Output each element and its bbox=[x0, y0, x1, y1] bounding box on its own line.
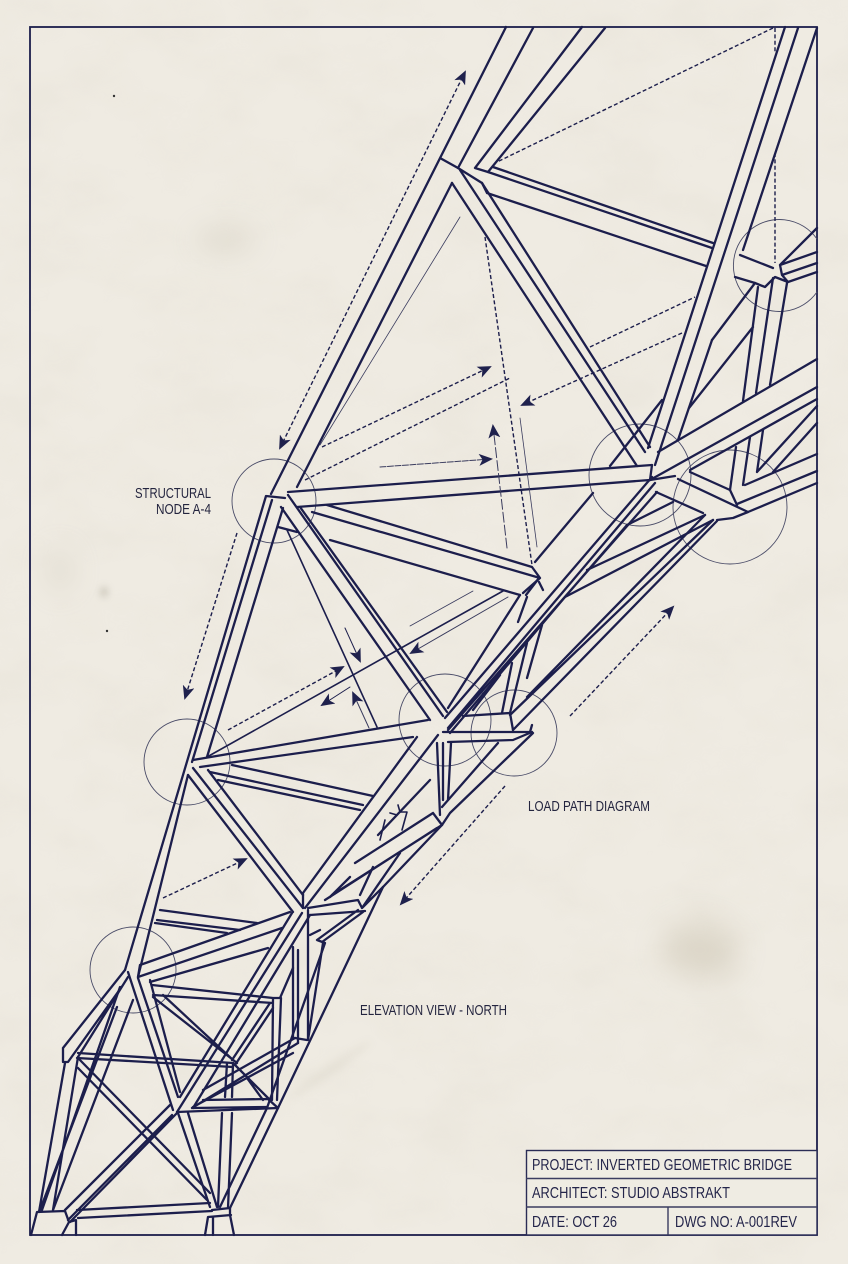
node detail circles bbox=[90, 220, 817, 1013]
truss: mid joint struts bbox=[443, 578, 543, 742]
arrow: small up bbox=[353, 693, 369, 728]
truss: lower right chord bbox=[230, 515, 717, 1208]
arrow: small down-left bbox=[322, 687, 350, 705]
arrow: centre horizontal bbox=[380, 459, 491, 467]
truss: top strut pair bbox=[475, 27, 605, 172]
truss: lower mid chord bbox=[267, 735, 451, 1108]
truss: upper right chord bbox=[648, 27, 817, 465]
label: elevation view: ELEVATION VIEW - NORTH bbox=[360, 1002, 507, 1019]
arrow: lower right down bbox=[401, 786, 505, 904]
truss: central horizontal beam bbox=[288, 465, 652, 507]
arrow: centre back load bbox=[522, 333, 682, 405]
footing: centre bbox=[205, 1208, 234, 1235]
truss: lower tower columns bbox=[152, 910, 323, 1112]
truss: mid beam to left node bbox=[193, 720, 428, 810]
footing: left bbox=[31, 1211, 76, 1235]
title block: date: DATE: OCT 26 bbox=[532, 1214, 617, 1231]
truss: top node diagonal bbox=[452, 170, 650, 466]
truss: diagonals from node A-4 bbox=[207, 495, 503, 757]
truss: upper right node bbox=[689, 228, 817, 408]
dashed construction lines bbox=[320, 28, 775, 626]
truss: short beams across lower chord bbox=[138, 910, 290, 982]
truss: main rising chord bbox=[445, 400, 713, 733]
label: structural node: NODE A-4 bbox=[156, 501, 211, 518]
arrow: centre upper right bbox=[322, 367, 490, 447]
truss: right bar and lower struts bbox=[650, 359, 817, 520]
arrow: brace line bbox=[411, 597, 508, 653]
truss: left lower chord bbox=[125, 496, 285, 977]
arrow: dashed lower left brace bbox=[228, 667, 343, 730]
truss: top cross beam bbox=[458, 167, 713, 266]
arrow: centre vertical bbox=[493, 426, 507, 548]
dashed line: centre bbox=[305, 378, 510, 480]
title block: drawing number: DWG NO: A-001REV bbox=[675, 1214, 797, 1231]
label: structural node: STRUCTURAL bbox=[135, 485, 211, 502]
title block bbox=[526, 1150, 817, 1235]
arrow: lower right up bbox=[570, 607, 673, 716]
truss: diagonal to lower node bbox=[188, 768, 303, 912]
arrow: lower left dashed bbox=[163, 859, 246, 898]
arrow: upper chord load, double headed bbox=[280, 72, 465, 448]
truss: base bracing bbox=[39, 970, 267, 1222]
truss: node A-4 to mid beam bbox=[312, 505, 540, 595]
arrow: small down bbox=[345, 628, 360, 661]
label: load path diagram: LOAD PATH DIAGRAM bbox=[528, 798, 650, 815]
title block: architect: ARCHITECT: STUDIO ABSTRAKT bbox=[532, 1185, 730, 1202]
arrow: left chord load bbox=[185, 533, 237, 698]
truss: upper left chord bbox=[271, 27, 533, 494]
